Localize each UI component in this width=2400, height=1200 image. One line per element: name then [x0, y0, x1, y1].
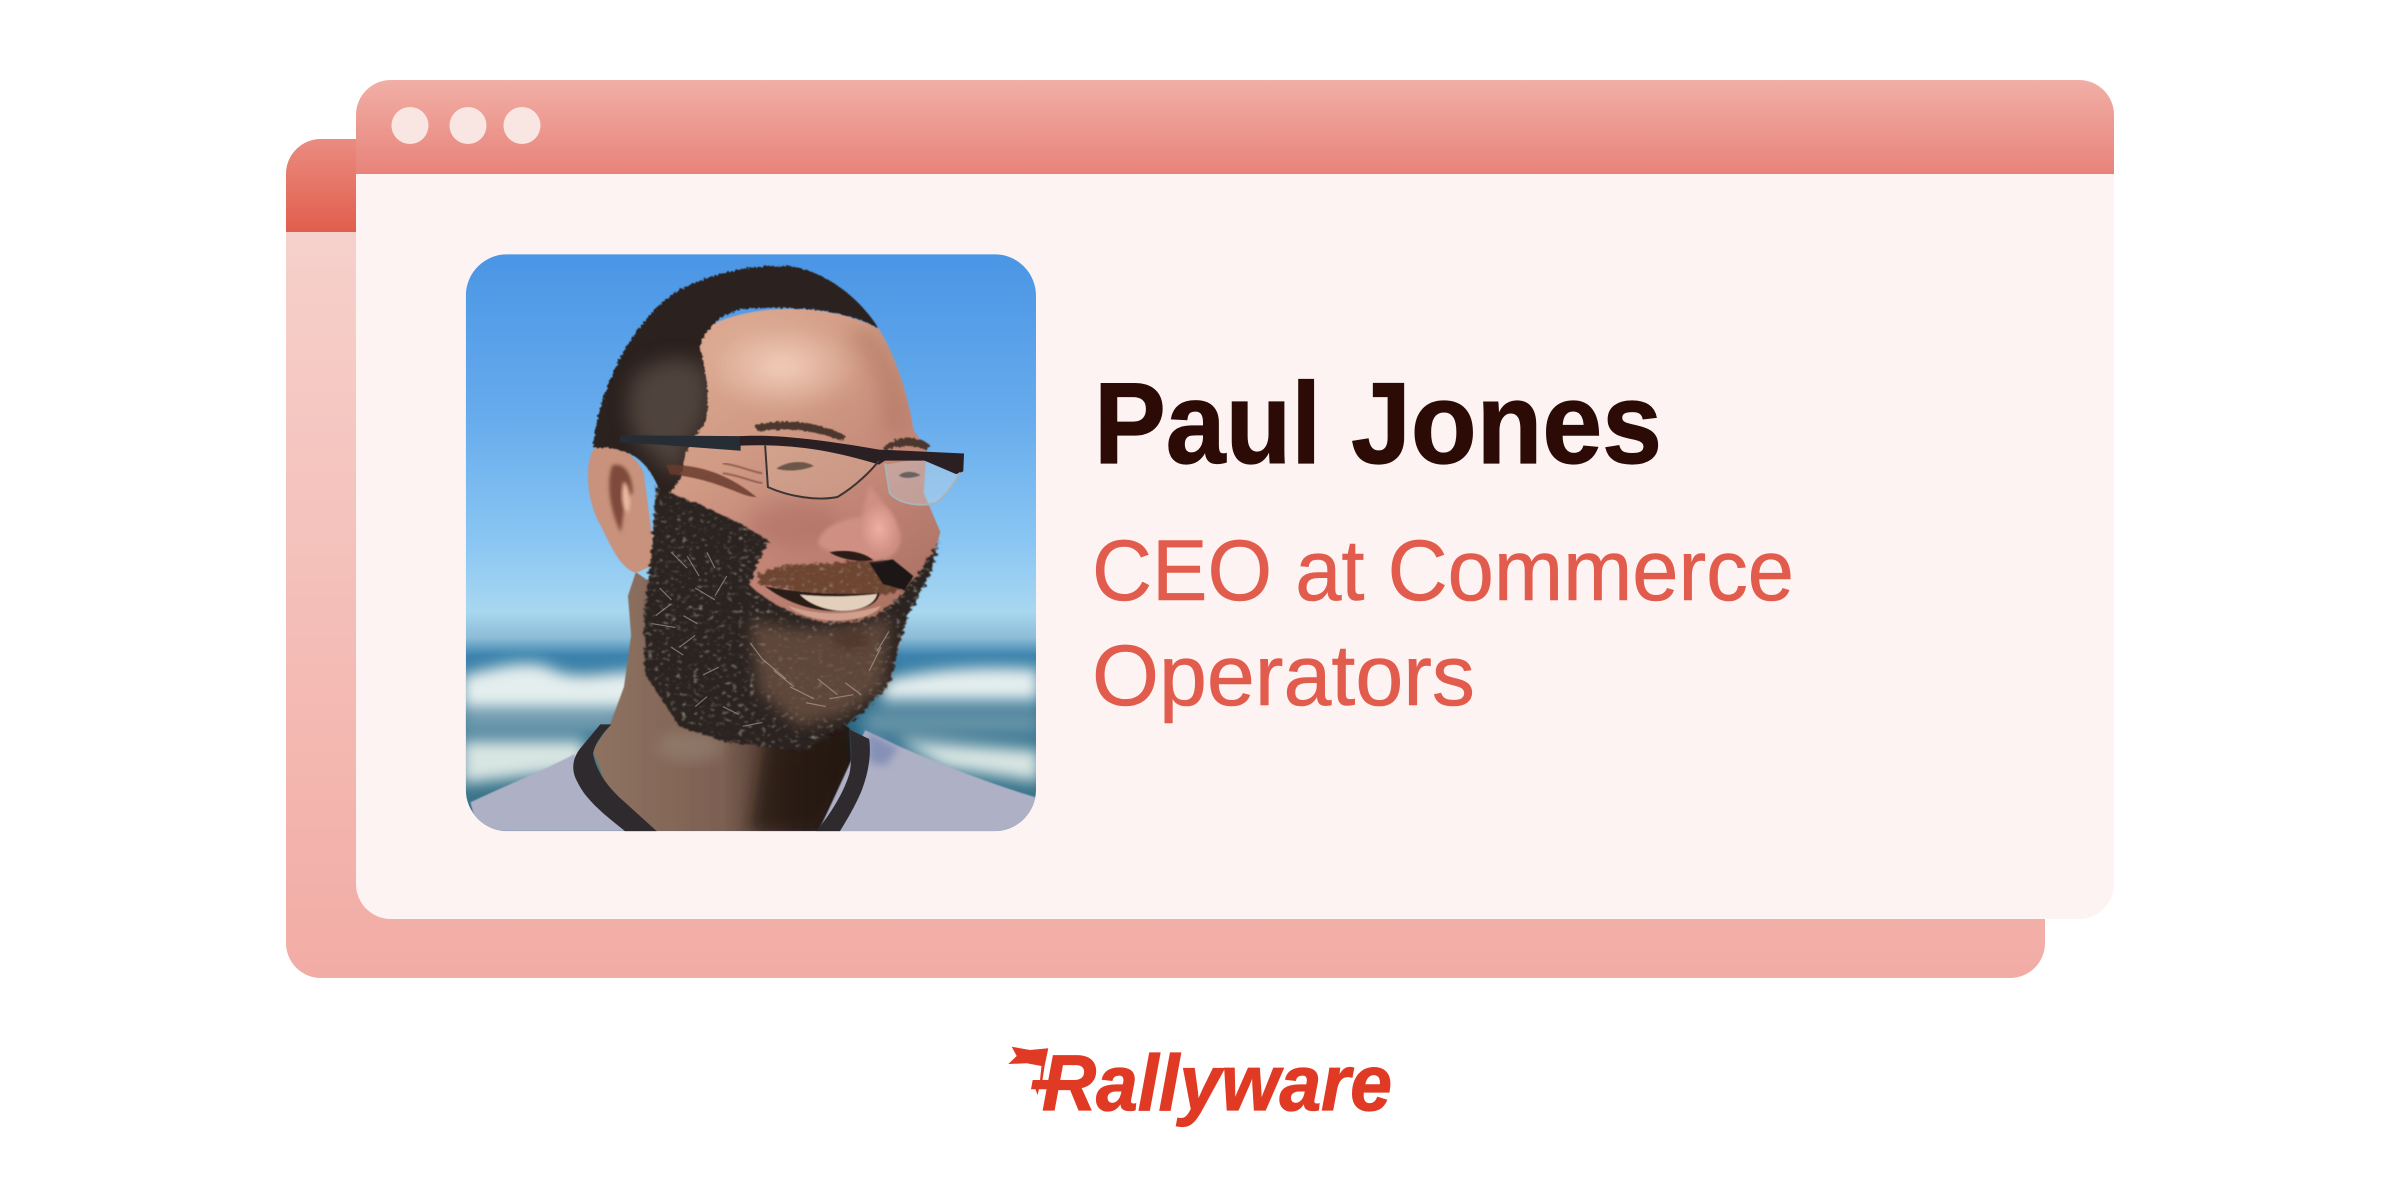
- neck: [592, 572, 851, 831]
- face shading: [747, 327, 913, 548]
- right lens tint: [885, 458, 960, 505]
- sky and sea: [466, 254, 1036, 831]
- glasses brow bar: [740, 436, 964, 474]
- mouth and teeth: [764, 586, 879, 611]
- Rallyware logo: [1008, 1038, 1392, 1127]
- shirt collar: [573, 724, 870, 832]
- mouth opening: [764, 586, 879, 611]
- glasses: [620, 435, 964, 505]
- hair grey tone: [628, 359, 709, 477]
- waves: [462, 664, 1039, 784]
- nostril: [830, 551, 873, 561]
- neck shadow: [751, 730, 851, 831]
- chin brown tone: [751, 616, 891, 726]
- name heading: Paul Jones: [1094, 360, 1662, 488]
- left lens frame: [765, 446, 879, 499]
- grey t-shirt: [471, 730, 1039, 833]
- moustache shadow: [869, 559, 913, 590]
- ear inner: [609, 465, 633, 533]
- teeth: [800, 594, 877, 611]
- back window: [286, 139, 2045, 978]
- ear highlight: [622, 481, 630, 513]
- nose: [819, 485, 901, 561]
- neck stubble: [658, 730, 725, 762]
- ear: [588, 445, 656, 573]
- left lens tint: [766, 446, 879, 498]
- front window header bar: [356, 80, 2114, 174]
- title line one: CEO at Commerce: [1092, 523, 1794, 619]
- eye wrinkles: [723, 463, 762, 483]
- right lens frame: [885, 463, 960, 505]
- shirt shoulder shadow: [867, 732, 899, 766]
- cheek shading: [748, 502, 834, 546]
- portrait photo: [462, 254, 1039, 833]
- eyes: [776, 462, 921, 478]
- front window body: [356, 80, 2114, 919]
- logo flag icon: [1008, 1047, 1055, 1095]
- nose highlight: [864, 509, 893, 548]
- temple shading: [845, 327, 913, 438]
- title line two: Operators: [1092, 628, 1475, 724]
- window control dots: [392, 107, 540, 144]
- beard: [644, 487, 940, 751]
- job title: [1092, 523, 1794, 724]
- temple shadow band: [667, 465, 756, 497]
- glasses temple arm: [620, 435, 741, 451]
- front window: [356, 80, 2114, 919]
- moustache: [758, 559, 913, 596]
- beard grey hairs: [652, 552, 889, 726]
- face: [652, 309, 940, 714]
- back window body: [286, 139, 2045, 978]
- logo wordmark: Rallyware: [1042, 1038, 1392, 1127]
- infographic canvas: [286, 80, 2114, 1128]
- eyebrows: [754, 421, 930, 450]
- forehead highlight: [718, 329, 848, 405]
- hair: [593, 266, 879, 501]
- lower lip: [788, 606, 881, 620]
- back window header bar: [286, 139, 2045, 232]
- soul patch: [832, 629, 870, 650]
